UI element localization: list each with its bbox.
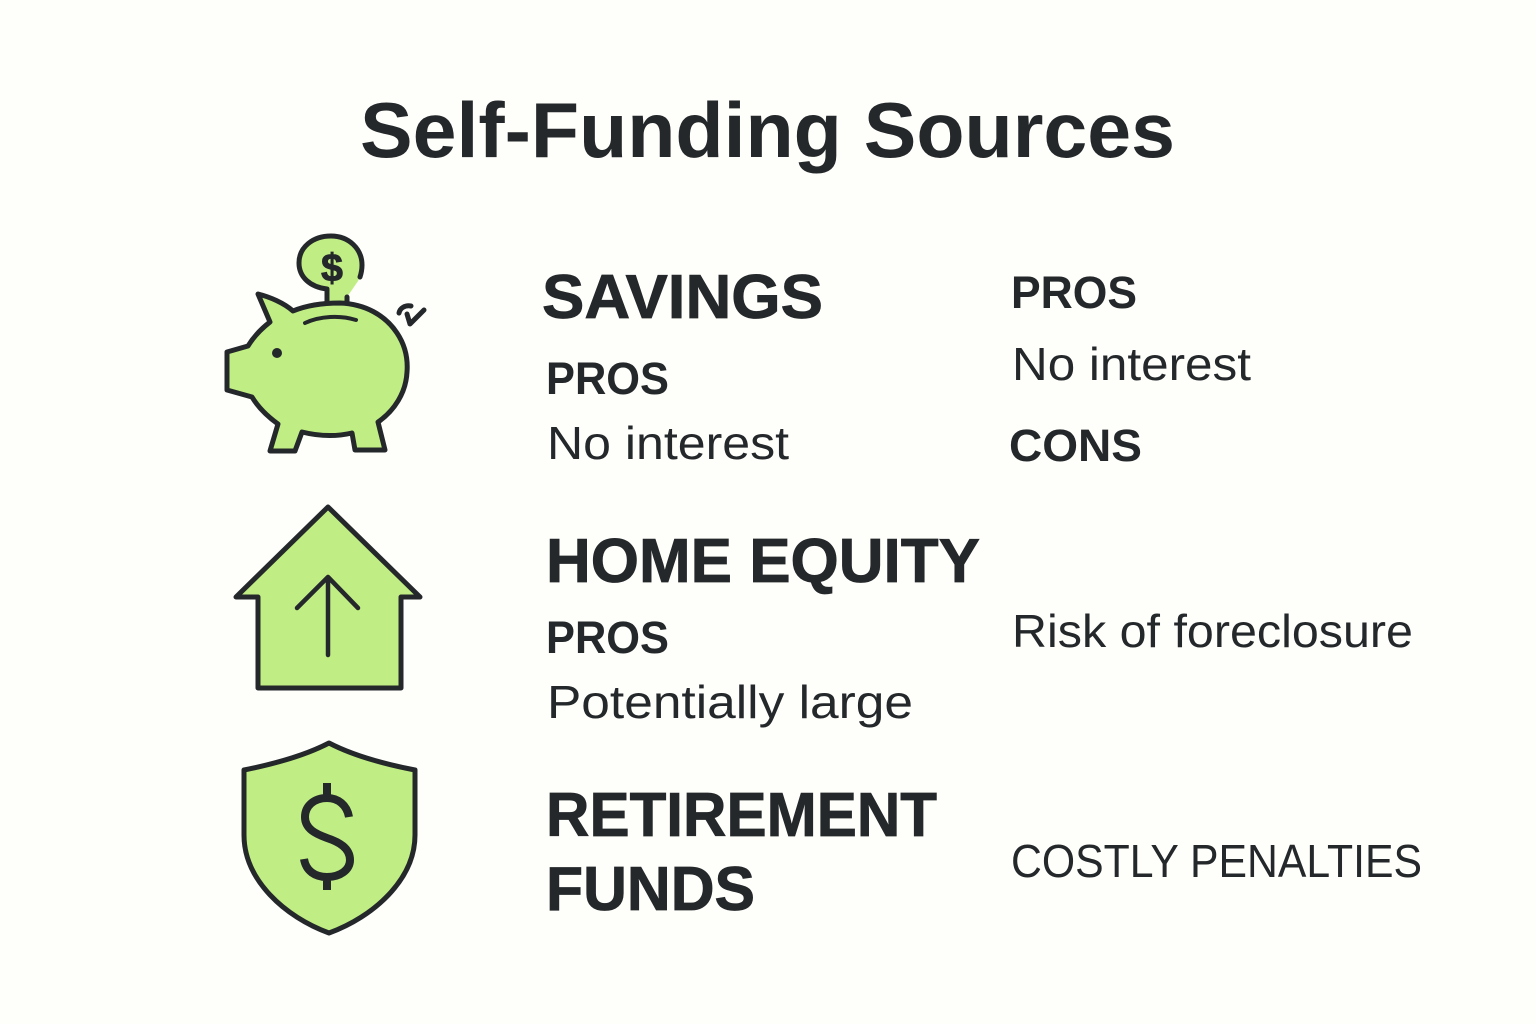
small mark beside pig xyxy=(399,306,424,324)
text: retirement con: COSTLY PENALTIES xyxy=(1011,835,1422,887)
coin dollar sign: $ xyxy=(321,247,343,290)
label: right column pros: PROS xyxy=(1011,267,1137,318)
text: savings pro: No interest xyxy=(547,417,789,469)
icon: piggy bank with coin xyxy=(227,236,424,451)
pig eye xyxy=(272,348,282,358)
label: right column cons: CONS xyxy=(1009,420,1142,471)
heading: home equity: HOME EQUITY xyxy=(546,527,980,596)
label: savings pros: PROS xyxy=(546,353,669,404)
pig back highlight xyxy=(305,317,356,323)
heading: savings: SAVINGS xyxy=(542,263,823,332)
label: home equity pros: PROS xyxy=(546,612,669,663)
heading: retirement funds: RETIREMENT xyxy=(546,781,937,850)
pig body xyxy=(227,294,407,451)
icon: shield with dollar xyxy=(244,743,415,933)
title: Self-Funding Sources xyxy=(360,86,1175,174)
text: home equity pro: Potentially large xyxy=(547,676,913,728)
coin xyxy=(299,236,362,303)
text: home equity con: Risk of foreclosure xyxy=(1012,605,1413,657)
text: right column pro: No interest xyxy=(1012,338,1251,390)
icon: house with up arrow xyxy=(236,507,420,688)
heading: retirement funds xyxy=(546,781,937,924)
heading: retirement funds: FUNDS xyxy=(546,855,755,924)
